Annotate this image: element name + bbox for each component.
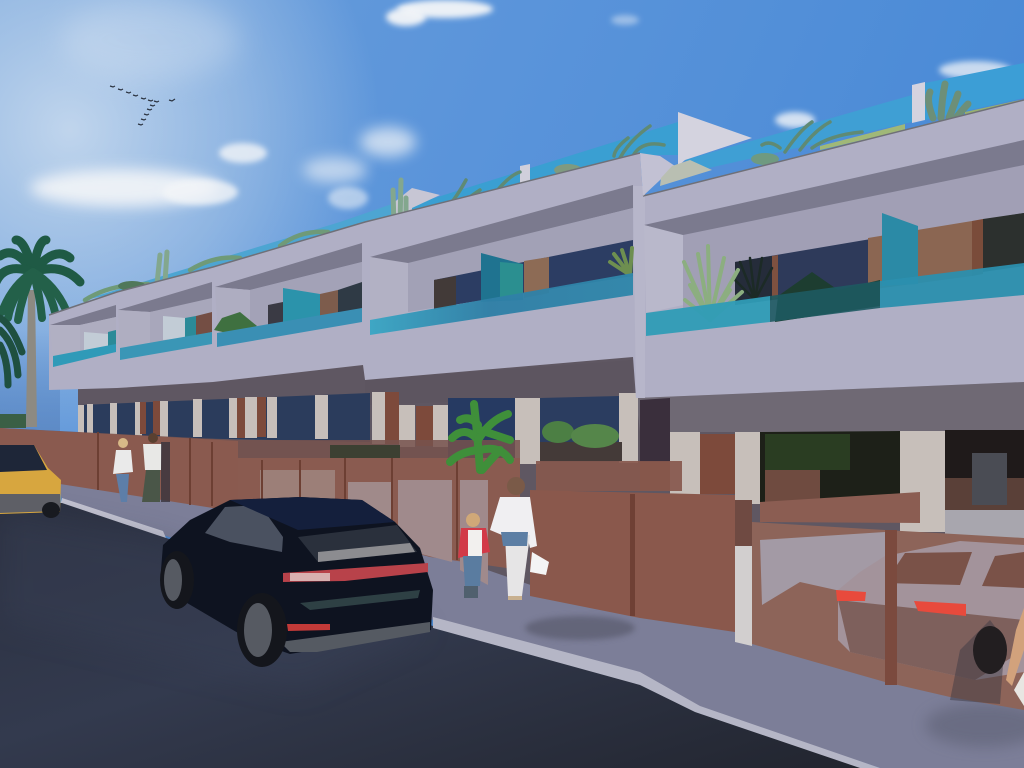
facade body: [49, 100, 1024, 398]
pedestrians: adult and child: [458, 477, 549, 600]
columns: [78, 392, 945, 532]
perforated brown fence: [0, 428, 1024, 710]
roof glass railings and blocks: [80, 63, 1024, 301]
sky: [0, 0, 1024, 480]
plant by gate: [450, 404, 510, 470]
ground floor: [78, 355, 1024, 610]
unit 4 balcony: [370, 185, 633, 335]
glass: [646, 296, 770, 336]
planter and greenery: [540, 421, 622, 461]
birds: [110, 86, 175, 125]
road: [0, 500, 862, 768]
pedestrians: couple walking: [113, 433, 170, 502]
plants: [684, 246, 772, 320]
pedestrian at right edge: [1006, 608, 1024, 706]
ground windows: [80, 393, 370, 442]
unit 5 balcony: [644, 140, 1024, 336]
semi-transparent back fences: [0, 428, 920, 523]
parked car behind gate: [836, 530, 1024, 704]
black SUV: [160, 497, 433, 667]
unit 2 balcony: [118, 282, 212, 360]
unit 3 balcony: [214, 243, 362, 347]
sidewalk: [58, 482, 1024, 768]
windows: [735, 213, 1024, 305]
clouds: [30, 0, 1011, 209]
palm trees: [0, 240, 80, 428]
rooftop shrubs: [118, 100, 1020, 291]
unit 1 balcony: [50, 305, 116, 367]
rooftop plants: [85, 84, 968, 300]
brown doors: [140, 392, 735, 494]
yellow car: [0, 445, 61, 518]
curb: [433, 617, 880, 768]
wall screen: [972, 453, 1007, 505]
